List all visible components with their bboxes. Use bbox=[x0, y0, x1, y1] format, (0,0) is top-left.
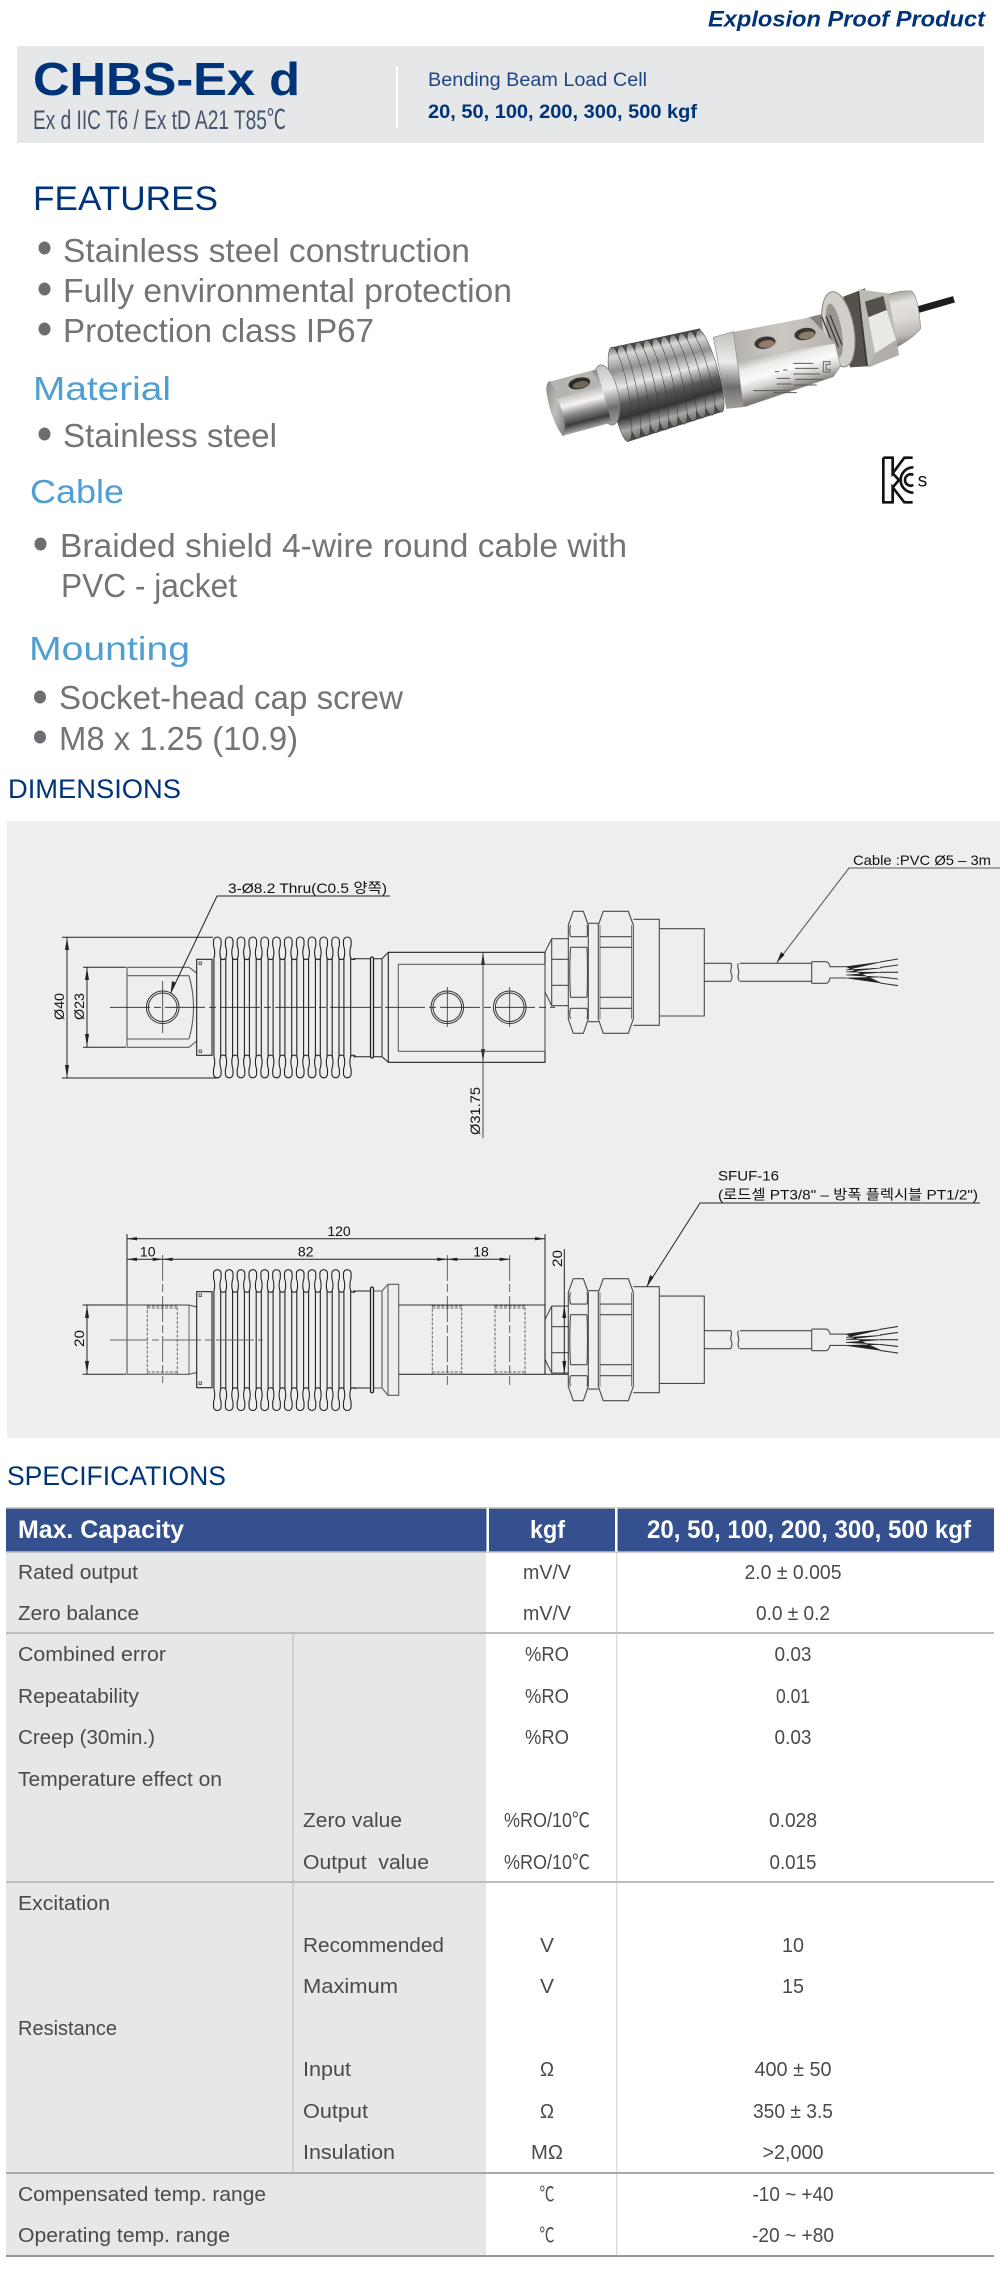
dimensions: 10, 82, 18: 10 bbox=[140, 1244, 156, 1260]
rows: accuracy: %RO bbox=[525, 1686, 569, 1708]
cable section bbox=[30, 473, 627, 604]
dimension: diameter 31.75 bbox=[467, 952, 485, 1138]
rows: electrical: V bbox=[540, 1976, 555, 1998]
feature list: Protection class IP67 bbox=[63, 312, 374, 349]
rows: electrical: Maximum bbox=[303, 1976, 398, 1998]
side view body outlines bbox=[127, 1270, 545, 1410]
callout: cable: Cable :PVC Ø5 – 3m bbox=[853, 852, 991, 868]
rows: accuracy: %RO bbox=[525, 1727, 569, 1749]
rows: temperature ranges: ℃ bbox=[540, 2225, 554, 2247]
specifications table bbox=[6, 1508, 994, 2257]
dimension: height 20 left bbox=[71, 1305, 126, 1374]
table header row bbox=[6, 1508, 994, 1552]
rows: accuracy: 0.01 bbox=[776, 1686, 810, 1708]
dimension: diameter 40: Ø40 bbox=[51, 993, 67, 1020]
dimension: length 120: 120 bbox=[327, 1223, 351, 1239]
rows: accuracy: 0.03 bbox=[774, 1727, 812, 1749]
rows: electrical: 10 bbox=[782, 1935, 804, 1957]
rows: accuracy: Temperature effect on bbox=[18, 1769, 222, 1791]
cable section: Braided shield 4-wire round cable with bbox=[60, 527, 627, 564]
rows: accuracy: Output value bbox=[303, 1852, 429, 1874]
mounting section: Mounting bbox=[29, 630, 190, 667]
rows: output and balance: Rated output bbox=[18, 1562, 138, 1584]
feature list: Fully environmental protection bbox=[63, 272, 512, 309]
rows: electrical: >2,000 bbox=[762, 2142, 824, 2164]
dimension: height 20 right bbox=[545, 1249, 568, 1374]
cable section: PVC - jacket bbox=[61, 567, 237, 604]
rows: output and balance bbox=[18, 1562, 842, 1625]
dimensions heading: DIMENSIONS bbox=[8, 774, 181, 804]
rows: electrical: Ω bbox=[540, 2059, 554, 2081]
callout: hole size bbox=[171, 880, 390, 993]
dimension: diameter 40 bbox=[51, 937, 217, 1078]
table backgrounds and rules bbox=[6, 1551, 994, 2257]
rows: temperature ranges: Compensated temp. range bbox=[18, 2184, 266, 2206]
dimensions: 10, 82, 18 bbox=[127, 1244, 510, 1261]
panel: title banner bbox=[17, 46, 984, 143]
rows: electrical: Ω bbox=[540, 2101, 554, 2123]
rows: electrical: Insulation bbox=[303, 2142, 395, 2164]
dimension: height 20 left: 20 bbox=[71, 1330, 87, 1347]
rows: accuracy: 0.015 bbox=[770, 1852, 816, 1874]
icon: KC certification mark: s bbox=[918, 471, 927, 492]
table header row: Max. Capacity bbox=[18, 1516, 184, 1544]
capacity range: 20, 50, 100, 200, 300, 500 kgf bbox=[428, 102, 698, 123]
callout: SFUF-16 fitting: (로드셀 PT3/8" – 방폭 플렉시블 PT1/2") bbox=[718, 1186, 978, 1202]
rows: temperature ranges: -20 ~ +80 bbox=[752, 2225, 834, 2247]
drawing: top view bbox=[51, 852, 1000, 1138]
rows: accuracy: %RO/10℃ bbox=[504, 1810, 590, 1832]
rows: accuracy: Creep (30min.) bbox=[18, 1727, 155, 1749]
rows: output and balance: 2.0 ± 0.005 bbox=[744, 1562, 842, 1584]
features heading: FEATURES bbox=[33, 180, 218, 218]
cable section: Cable bbox=[30, 473, 124, 510]
certification subtitle: Ex d IIC T6 / Ex tD A21 T85℃ bbox=[33, 105, 286, 135]
connector and cable bbox=[545, 911, 898, 1033]
rows: accuracy: 0.03 bbox=[774, 1644, 812, 1666]
panel: dimensions drawings bbox=[7, 821, 1000, 1438]
callout: hole size: 3-Ø8.2 Thru(C0.5 양쪽) bbox=[228, 880, 387, 896]
dimension: length 120 bbox=[127, 1223, 545, 1374]
dimensions: 10, 82, 18: 18 bbox=[473, 1244, 489, 1260]
rows: accuracy: 0.028 bbox=[769, 1810, 817, 1832]
rows: electrical: 400 ± 50 bbox=[754, 2059, 832, 2081]
features section bbox=[33, 180, 512, 349]
product category tag: Explosion Proof Product bbox=[708, 6, 987, 32]
rows: electrical: 15 bbox=[782, 1976, 804, 1998]
rows: output and balance: Zero balance bbox=[18, 1603, 139, 1625]
drawing: side view bbox=[71, 1168, 980, 1410]
dimension: diameter 31.75: Ø31.75 bbox=[467, 1087, 483, 1135]
dimensions: 10, 82, 18: 82 bbox=[298, 1244, 314, 1260]
material section: Material bbox=[33, 370, 171, 407]
material section: Stainless steel bbox=[63, 417, 277, 454]
connector and cable bbox=[545, 1279, 898, 1401]
mounting section bbox=[29, 630, 403, 757]
rows: output and balance: 0.0 ± 0.2 bbox=[756, 1603, 830, 1625]
feature list: Stainless steel construction bbox=[63, 232, 470, 269]
dimension: diameter 23 bbox=[71, 967, 126, 1047]
rows: temperature ranges bbox=[18, 2184, 834, 2247]
rows: temperature ranges: Operating temp. range bbox=[18, 2225, 230, 2247]
mounting holes bbox=[146, 981, 526, 1033]
rows: accuracy: Repeatability bbox=[18, 1686, 139, 1708]
rows: output and balance: mV/V bbox=[523, 1603, 572, 1625]
dimension: diameter 23: Ø23 bbox=[71, 993, 87, 1020]
mounting section: M8 x 1.25 (10.9) bbox=[59, 720, 298, 757]
rows: electrical: 350 ± 3.5 bbox=[753, 2101, 833, 2123]
product type: Bending Beam Load Cell bbox=[428, 70, 647, 91]
callout: SFUF-16 fitting: SFUF-16 bbox=[718, 1168, 779, 1184]
material section bbox=[33, 370, 277, 454]
rows: electrical: Excitation bbox=[18, 1893, 110, 1915]
dimension: height 20 right: 20 bbox=[549, 1250, 565, 1267]
callout: SFUF-16 fitting bbox=[647, 1168, 980, 1287]
rows: electrical: MΩ bbox=[531, 2142, 563, 2164]
rows: temperature ranges: -10 ~ +40 bbox=[752, 2184, 834, 2206]
rows: accuracy bbox=[18, 1644, 817, 1874]
rows: accuracy: Zero value bbox=[303, 1810, 402, 1832]
product photo: load cell bbox=[546, 288, 954, 443]
rows: electrical: Output bbox=[303, 2101, 368, 2123]
mounting section: Socket-head cap screw bbox=[59, 679, 403, 716]
rows: electrical: Resistance bbox=[18, 2018, 117, 2040]
rows: electrical: Recommended bbox=[303, 1935, 444, 1957]
rows: accuracy: %RO/10℃ bbox=[504, 1852, 590, 1874]
feature list bbox=[38, 232, 512, 349]
callout: cable bbox=[777, 852, 1000, 963]
rows: electrical bbox=[18, 1893, 833, 2164]
specifications heading: SPECIFICATIONS bbox=[7, 1461, 226, 1491]
table header row: kgf bbox=[530, 1516, 566, 1544]
rows: output and balance: mV/V bbox=[523, 1562, 572, 1584]
rows: electrical: Input bbox=[303, 2059, 351, 2081]
hidden holes (dashed) bbox=[147, 1306, 525, 1374]
icon: KC certification mark bbox=[883, 458, 927, 502]
title: CHBS-Ex d bbox=[33, 53, 300, 105]
rows: accuracy: %RO bbox=[525, 1644, 569, 1666]
table header row: 20, 50, 100, 200, 300, 500 kgf bbox=[647, 1516, 972, 1544]
rows: temperature ranges: ℃ bbox=[540, 2184, 554, 2206]
rows: electrical: V bbox=[540, 1935, 555, 1957]
top view body outlines bbox=[127, 937, 545, 1078]
rows: accuracy: Combined error bbox=[18, 1644, 166, 1666]
